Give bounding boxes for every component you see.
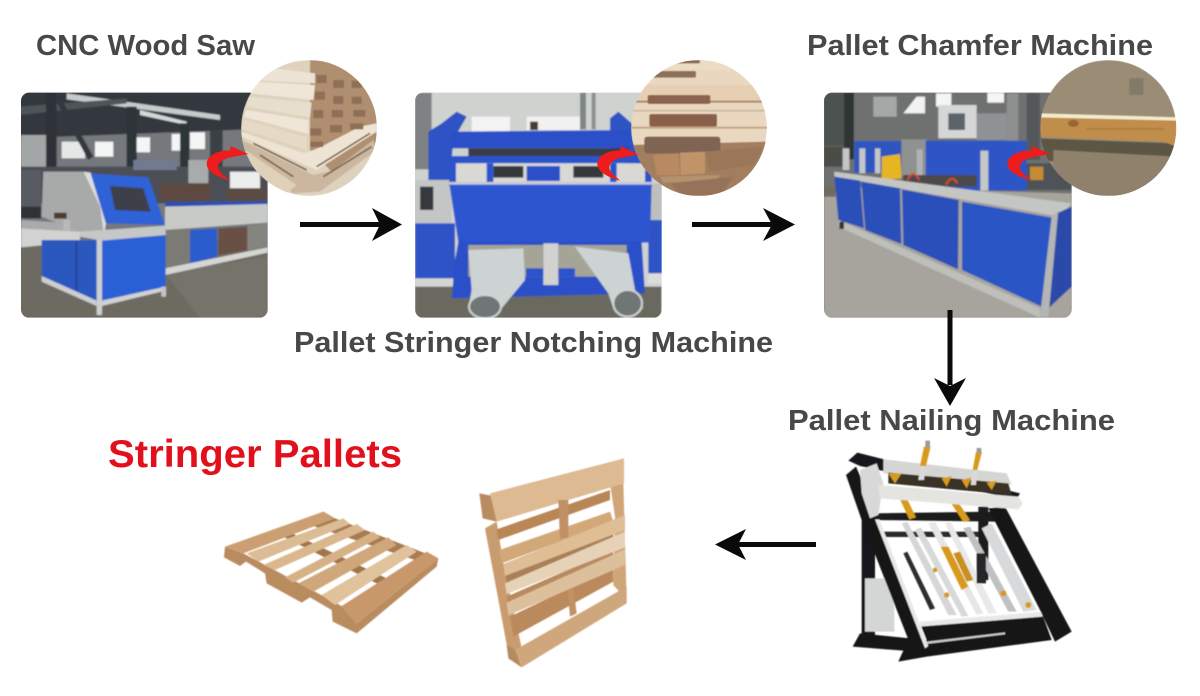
heading: Pallet Nailing Machine: Pallet Nailing Machine	[788, 405, 1115, 437]
inset: lumber stack circle	[241, 60, 377, 196]
icon: red curved arrow	[207, 146, 248, 181]
photo: CNC wood saw machine	[17, 90, 273, 323]
arrow: notching to chamfer	[692, 208, 795, 241]
heading: Stringer Pallets: Stringer Pallets	[108, 433, 402, 476]
heading: CNC Wood Saw: CNC Wood Saw	[36, 30, 255, 62]
panel: CNC wood saw photo with lumber inset	[17, 60, 377, 323]
photo: chamfer machine	[820, 90, 1077, 323]
heading: Pallet Stringer Notching Machine: Pallet Stringer Notching Machine	[294, 327, 773, 359]
icon: red curved arrow	[597, 146, 638, 181]
illustration: stringer pallets	[224, 458, 627, 667]
photo: notching machine	[410, 90, 667, 323]
arrow: chamfer to nailing	[934, 310, 966, 406]
inset: chamfered stringer circle	[1040, 60, 1177, 196]
icon: red curved arrow	[1007, 146, 1050, 181]
pallet standing upright	[479, 458, 627, 667]
inset: notched stringers circle	[630, 60, 770, 196]
illustration: pallet nailing machine	[846, 441, 1072, 662]
panel: stringer notching machine photo with notched stringer inset	[410, 60, 770, 323]
panel: pallet chamfer machine photo with chamfered stringer inset	[820, 60, 1177, 323]
pallet lying flat	[224, 512, 438, 633]
heading: Pallet Chamfer Machine: Pallet Chamfer Machine	[807, 30, 1153, 62]
arrow: saw to notching	[300, 208, 402, 241]
arrow: nailing to pallets	[715, 529, 816, 560]
